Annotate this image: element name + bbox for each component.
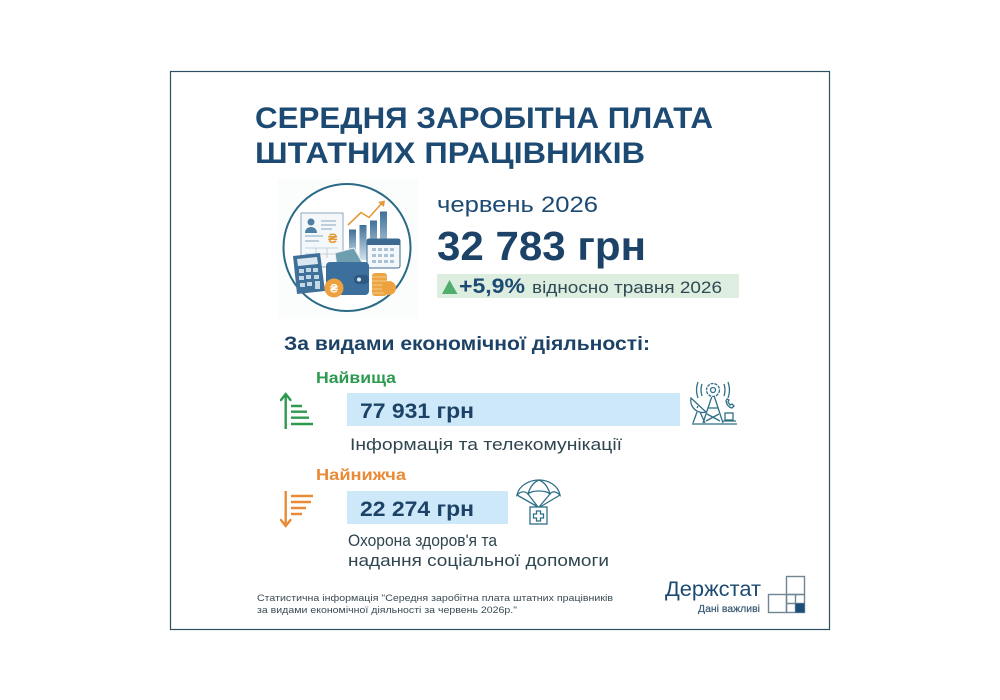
logo: Держстат: Держстат: [665, 577, 761, 601]
wallet: [326, 262, 369, 295]
lowest category: надання соціальної допомоги: [348, 551, 609, 570]
source note: Статистична інформація "Середня заробітна плата штатних працівників: [257, 593, 613, 604]
highest category: Інформація та телекомунікації: [350, 435, 622, 454]
calendar: [367, 239, 400, 268]
bar: highest value: [347, 393, 680, 426]
bar: lowest value: [347, 491, 508, 524]
logo: Держстат: [665, 576, 804, 615]
calculator: [293, 253, 325, 294]
icon: orange descending list arrow: [281, 491, 313, 526]
lowest category: Охорона здоров'я та: [348, 531, 497, 550]
source note: за видами економічної діяльності за червень 2026р.": [257, 605, 517, 616]
title: ШТАТНИХ ПРАЦІВНИКІВ: [255, 137, 645, 170]
change badge: +5,9%: [459, 275, 525, 298]
main value: 32 783 грн: [437, 223, 646, 269]
change badge: відносно травня 2026: [532, 278, 722, 297]
document: ₴: [328, 230, 338, 246]
period label: червень 2026: [437, 192, 598, 217]
icon: green ascending list arrow: [281, 394, 313, 429]
source note: [257, 593, 613, 616]
title: [255, 102, 713, 170]
bars and trend arrow: [348, 200, 387, 260]
highest label: Найвища: [316, 370, 396, 387]
coin stack: [372, 273, 396, 296]
lowest category: [348, 531, 609, 570]
icon: finance illustration in circle: [278, 179, 418, 319]
change badge: [437, 274, 739, 298]
bar: highest value: 77 931 грн: [360, 400, 474, 423]
bar: lowest value: 22 274 грн: [360, 498, 474, 521]
panel: framed card: [170, 72, 830, 630]
title: СЕРЕДНЯ ЗАРОБІТНА ПЛАТА: [255, 102, 713, 135]
logo: Держстат: Дані важливі: [698, 604, 760, 615]
coin: ₴: [330, 282, 338, 296]
lowest label: Найнижча: [316, 467, 406, 484]
banknotes: [335, 248, 363, 267]
icon: parachute with medical box: [517, 480, 560, 524]
section heading: За видами економічної діяльності:: [284, 334, 650, 355]
icon: telecom tower: [691, 382, 737, 424]
